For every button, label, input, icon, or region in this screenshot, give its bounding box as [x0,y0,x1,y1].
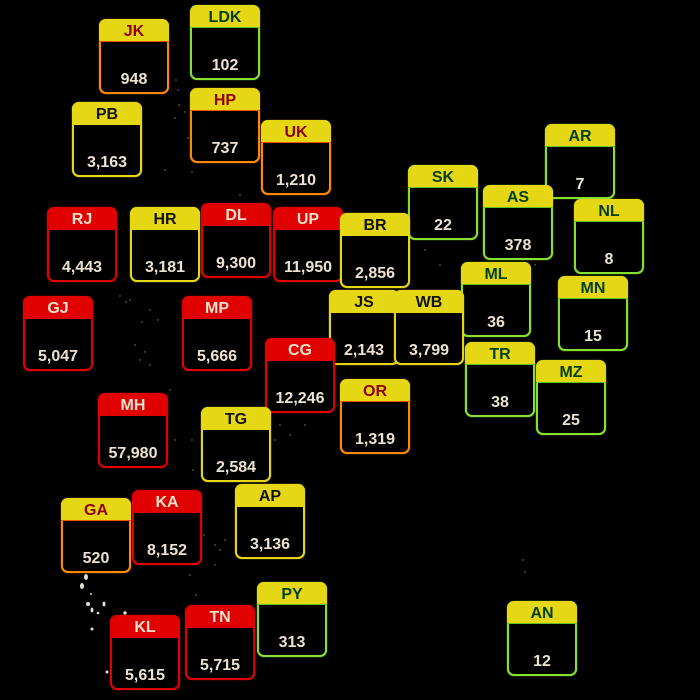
tile: HR: 3,181 [145,259,185,276]
tile: PY [257,582,327,657]
tile: UK: UK [284,124,308,141]
tile: BR: 2,856 [355,265,395,282]
tile: AR: AR [568,128,592,145]
tile: JK: JK [124,23,144,40]
tile: HP: 737 [212,140,238,157]
tile: CG: 12,246 [276,390,324,407]
tile: RJ: 4,443 [62,259,102,276]
tile: NL: 8 [605,251,613,268]
tile: WB: WB [416,294,442,311]
tile: MN [558,276,628,351]
tile: JK: 948 [121,71,147,88]
tile: GJ: 5,047 [38,348,78,365]
tile: KA [132,490,202,565]
tile: UK: 1,210 [276,172,316,189]
tile: UP [273,207,343,282]
tile: MH: MH [121,397,145,414]
tile: LDK: 102 [212,57,238,74]
tile: TR: TR [489,346,511,363]
tile: ML: ML [484,266,508,283]
tile: KA: 8,152 [147,542,187,559]
tile: JS: JS [354,294,374,311]
tile: MP: 5,666 [197,348,237,365]
tile: SK: SK [432,169,454,186]
tile: KL [110,615,180,690]
tile: DL: 9,300 [216,255,256,272]
tile: MZ: MZ [559,364,583,381]
tile: GA [61,498,131,573]
tile: TN [185,605,255,680]
tile: TG [201,407,271,482]
tile: WB [394,290,464,365]
tile: NL [574,199,644,274]
tile: TN: 5,715 [200,657,240,674]
tile: AP [235,484,305,559]
tile: CG [265,338,335,413]
tile: PB: 3,163 [87,154,127,171]
tile: MZ: 25 [562,412,580,429]
tile: TR [465,342,535,417]
tile: MP: MP [205,300,229,317]
tile: AR: 7 [576,176,584,193]
tile: NL: NL [598,203,620,220]
tile: JS [329,290,399,365]
tile: GA: 520 [83,550,109,567]
tile: AS: 378 [505,237,531,254]
tile: BR [340,213,410,288]
tile: AN: 12 [533,653,551,670]
tile: PY: 313 [279,634,305,651]
tile: KL: KL [134,619,156,636]
tile: HR: HR [153,211,177,228]
tile: HP: HP [214,92,236,109]
tile: LDK: LDK [209,9,241,26]
tile: MH [98,393,168,468]
tile: WB: 3,799 [409,342,449,359]
tile: JK [99,19,169,94]
tile: ML: 36 [487,314,505,331]
tile: AS: AS [507,189,529,206]
tile: MN: MN [581,280,605,297]
tile: UP: 11,950 [284,259,332,276]
tile: AR [545,124,615,199]
tile: RJ [47,207,117,282]
tile: DL [201,203,271,278]
tile: BR: BR [363,217,387,234]
tile: MP [182,296,252,371]
tile: AP: 3,136 [250,536,290,553]
tile: OR: OR [363,383,387,400]
tile: LDK [190,5,260,80]
tile: PB [72,102,142,177]
tile: AP: AP [259,488,281,505]
tile: HR [130,207,200,282]
tile: KA: KA [155,494,179,511]
tile: MZ [536,360,606,435]
tile: UK [261,120,331,195]
tile: OR [340,379,410,454]
tile: PB: PB [96,106,118,123]
tile: GJ [23,296,93,371]
tile: AN [507,601,577,676]
tile: TG: 2,584 [216,459,256,476]
tile: AS [483,185,553,260]
tile: GA: GA [84,502,108,519]
tile: TR: 38 [491,394,509,411]
tile: UP: UP [297,211,319,228]
tile: ML [461,262,531,337]
tile: DL: DL [225,207,247,224]
tile: SK: 22 [434,217,452,234]
tile: MN: 15 [584,328,602,345]
tile: JS: 2,143 [344,342,384,359]
tile: HP [190,88,260,163]
tile: RJ: RJ [72,211,92,228]
tile: MH: 57,980 [109,445,157,462]
tile: KL: 5,615 [125,667,165,684]
tile: CG: CG [288,342,312,359]
tile: TG: TG [225,411,247,428]
tile: AN: AN [530,605,554,622]
tile: SK [408,165,478,240]
tile: GJ: GJ [47,300,69,317]
tile: PY: PY [281,586,303,603]
tile: OR: 1,319 [355,431,395,448]
tile: TN: TN [209,609,231,626]
